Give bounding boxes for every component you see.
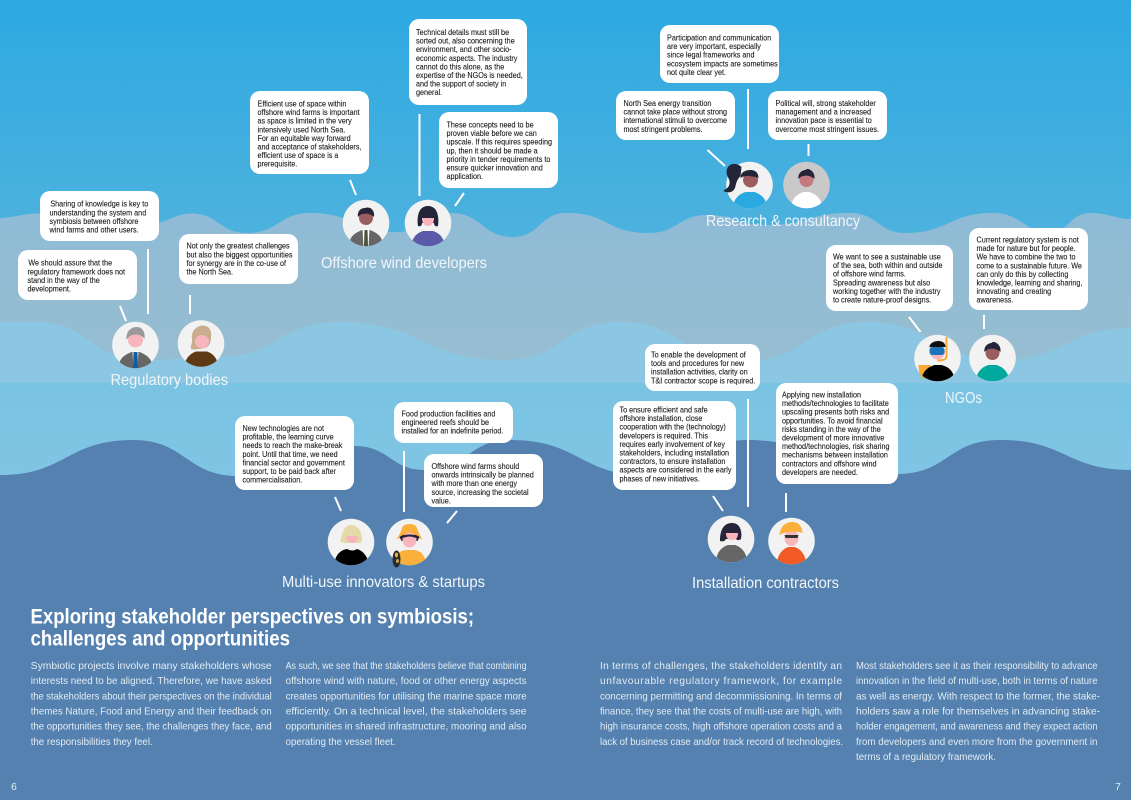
connector line [909,317,920,332]
avatar: contractor man with hard hat [768,518,815,565]
avatar: regulator man in suit [112,322,159,369]
text block: column 2: efficiently. On a technical level, the stakeholders see [286,706,527,718]
speech bubble: regulatory framework: We should assure that the [28,258,112,268]
speech bubble: sustainable use: of offshore wind farms. [833,269,906,279]
text block: column 1: themes Nature, Food and Energy and their feedback on [31,706,272,718]
connector line [785,493,787,512]
stakeholder label: Offshore wind developers [321,255,487,272]
speech bubble: proven concepts: up, then it should be made a [446,146,538,155]
speech bubble: new technologies: commercialisation. [242,475,302,485]
speech bubble: sustainable use [826,245,953,311]
speech bubble: technical details: environment, and other socio- [416,45,512,54]
title: Exploring stakeholder perspectives on symbiosis; [30,604,474,628]
speech bubble: offshore wind farms: onwards intrinsically be planned [432,470,534,480]
speech bubble: new installation methods: Applying new installation [782,390,861,400]
speech bubble: technical details: and the support of society in [416,79,506,89]
speech bubble: sharing of knowledge [40,191,159,241]
speech bubble: tools and procedures: tools and procedures for new [651,359,744,368]
speech bubble: participation: since legal frameworks and [667,50,754,60]
speech bubble: greatest challenges: but also the biggest opportunities [186,250,293,259]
speech bubble: new technologies: New technologies are not [242,423,325,433]
speech bubble: current regulatory system: knowledge, learning and sharing, [976,278,1082,288]
speech bubble: proven concepts [439,112,558,188]
text block: column 3: lack of business case and/or track record of technologies. [600,737,843,748]
text block: column 4: as well as energy. With respect to the former, the stake- [856,691,1100,702]
speech bubble: efficient use of space: prerequisite. [258,159,297,169]
background: deep-blue foreground wave [0,440,1131,800]
speech bubble: proven concepts: upscale. If this requires speeding [446,137,552,147]
connector line [983,315,985,329]
speech bubble: current regulatory system [969,228,1088,310]
speech bubble: sharing of knowledge: wind farms and other users. [49,225,139,235]
panel: regulatory bodies [18,191,298,389]
connector line [418,114,420,196]
avatar: innovator woman [328,519,374,566]
speech bubble: efficient use of space: For an equitable way forward [258,133,351,143]
avatar: NGO man [969,335,1016,382]
connector line [747,89,749,149]
page number: left: 6 [11,781,17,793]
connector line [120,306,126,321]
speech bubble: proven concepts: proven viable before we can [446,129,537,138]
speech bubble: energy transition: international stimuli to overcome [624,116,727,125]
connector line [147,249,149,314]
speech bubble: new installation methods: risks standing in the way of the [782,424,881,434]
speech bubble: energy transition: North Sea energy transition [624,98,711,108]
speech bubble: efficient and safe installation: offshore installation, close [620,414,702,423]
text block: column 4: terms of a regulatory framework. [856,752,996,763]
speech bubble: sustainable use: Spreading awareness but also [833,278,931,287]
text block: column 1: the responsibilities they feel. [31,737,153,748]
speech bubble: sustainable use: working together with the industry [832,286,941,296]
speech bubble: offshore wind farms: with more than one energy [431,479,517,488]
text block: column 3: high insurance costs, high offshore operation costs and a [600,722,842,733]
text block: column 2: As such, we see that the stakeholders believe that combining [286,661,527,672]
speech bubble: efficient use of space: intensively used North Sea. [258,125,345,134]
avatar: researcher woman with ponytail [724,162,773,209]
speech bubble: technical details: economic aspects. The industry [416,53,517,63]
connector line [403,451,405,512]
text block: column 4: from developers and even more from the government in [856,737,1098,748]
speech bubble: food production: engineered reefs should be [402,418,489,427]
speech bubble: current regulatory system: made for nature but for people. [976,244,1076,253]
speech bubble: participation: not quite clear yet. [667,67,726,77]
speech bubble: current regulatory system: awareness. [976,295,1013,305]
speech bubble: participation: are very important, especially [667,42,761,51]
text block: column 4: holder engagement, and awareness and they expect action [856,722,1098,733]
stakeholder label: Installation contractors [692,575,839,592]
speech bubble: tools and procedures: installation activities, clarity on [651,367,748,377]
speech bubble: political will: Political will, strong stakeholder [776,98,876,108]
text block: column 4 [856,661,1100,763]
text block: column 3: In terms of challenges, the stakeholders identify an [600,661,842,672]
background: sky [0,0,1131,300]
speech bubble: participation [660,25,779,83]
speech bubble: sustainable use: of the sea, both within and outside [833,261,943,270]
speech bubble: regulatory framework: regulatory framework does not [28,267,126,276]
connector line [335,497,341,511]
text block: column 3: concerning permitting and decommissioning. In terms of [600,691,842,702]
speech bubble: food production [394,402,513,443]
text block: column 4: Most stakeholders see it as their responsibility to advance [856,661,1098,672]
text block: column 2: creates opportunities for utilising the marine space more [286,691,527,702]
speech bubble: current regulatory system: innovating and creating [976,287,1051,296]
text block: column 1: the opportunities they see, the challenges they face, and [31,722,272,733]
speech bubble: new technologies: support, to be paid back after [242,466,336,476]
stakeholder label: NGOs [945,390,982,407]
speech bubble: proven concepts: priority in tender requirements to [446,154,551,164]
speech bubble: sustainable use: We want to see a sustainable use [833,252,941,262]
connector line [455,193,464,206]
title: challenges and opportunities [30,627,290,651]
speech bubble: regulatory framework [18,250,137,300]
speech bubble: energy transition: cannot take place without strong [624,107,727,117]
speech bubble: new installation methods [776,383,898,484]
speech bubble: new installation methods: opportunities. To avoid financial [782,416,883,425]
speech bubble: greatest challenges: the North Sea. [186,267,233,277]
speech bubble: technical details: sorted out, also concerning the [416,36,515,46]
speech bubble: efficient and safe installation: To ensure efficient and safe [620,405,708,415]
speech bubble: new installation methods: upscaling presents both risks and [782,407,889,417]
speech bubble: current regulatory system: come to a sustainable future. We [976,261,1082,270]
speech bubble: offshore wind farms: source, increasing the societal [432,487,529,497]
speech bubble: political will: management and a increased [776,107,871,117]
page number: right: 7 [1115,781,1121,793]
speech bubble: efficient and safe installation: phases of new initiatives. [620,474,700,483]
speech bubble: new installation methods: method/technologies, risk sharing [782,442,890,451]
speech bubble: efficient use of space: and acceptance of stakeholders, [258,142,361,152]
speech bubble: new technologies: profitable, the learning curve [242,432,334,442]
speech bubble: greatest challenges: for synergy are in the co-use of [186,258,287,268]
speech bubble: new installation methods: development of more innovative [782,433,884,443]
speech bubble: participation: Participation and communication [667,33,771,43]
speech bubble: technical details [409,19,527,105]
avatar: researcher man on grey [783,162,830,209]
speech bubble: proven concepts: application. [446,172,483,181]
speech bubble: new installation methods: methods/technologies to facilitate [782,399,889,408]
speech bubble: political will: innovation pace is essential to [776,116,872,125]
speech bubble: technical details: cannot do this alone, as the [416,62,504,72]
speech bubble: current regulatory system: Current regulatory system is not [976,235,1080,245]
speech bubble: offshore wind farms [424,454,543,507]
panel: NGOs [826,228,1088,407]
connector line [447,511,457,523]
connector line [189,295,191,314]
speech bubble: technical details: expertise of the NGOs is needed, [416,70,523,80]
speech bubble: sustainable use: to create nature-proof designs. [833,295,931,305]
text block: column 2 [286,661,527,748]
speech bubble: energy transition [616,91,735,140]
speech bubble: offshore wind farms: Offshore wind farms should [432,461,519,471]
speech bubble: efficient use of space: as space is limited in the very [258,116,352,126]
text block: column 1: Symbiotic projects involve many stakeholders whose [31,661,272,672]
speech bubble: sharing of knowledge: Sharing of knowledge is key to [50,199,149,209]
avatar: developer man in suit [343,200,389,247]
connector line [808,144,810,156]
speech bubble: technical details: general. [416,88,442,97]
speech bubble: new installation methods: developers are needed. [782,467,858,477]
speech bubble: offshore wind farms: value. [432,496,451,506]
speech bubble: tools and procedures: To enable the development of [651,350,746,360]
speech bubble: new technologies: needs to reach the make-break [242,441,342,450]
text block: column 1: interests need to be aligned. Therefore, we have asked [31,676,272,687]
speech bubble: new technologies [235,416,354,490]
speech bubble: greatest challenges: Not only the greatest challenges [186,241,290,251]
text block: column 3: unfavourable regulatory framework, for example [600,676,842,687]
speech bubble: efficient use of space: efficient use of space is a [258,151,339,160]
connector line [350,180,356,195]
speech bubble: current regulatory system: We have to combine the two to [976,252,1076,262]
speech bubble: new technologies: point. Until that time, we need [242,449,338,459]
panel: research and consultancy [616,25,887,230]
speech bubble: political will [768,91,887,140]
speech bubble: tools and procedures [645,344,760,391]
speech bubble: proven concepts: ensure quicker innovation and [446,163,543,173]
speech bubble: efficient and safe installation: developers is required. This [620,431,708,440]
speech bubble: participation: ecosystem impacts are sometimes [667,59,778,68]
avatar: contractor woman [708,516,754,563]
avatar: fisher in yellow hat with mussels [386,519,433,568]
speech bubble: energy transition: most stringent problems. [624,124,703,134]
speech bubble: regulatory framework: development. [28,284,71,294]
speech bubble: regulatory framework: stand in the way of the [28,275,100,285]
avatar: diver with snorkel [914,335,961,382]
speech bubble: sharing of knowledge: symbiosis between offshore [50,216,138,226]
panel: multi-use innovators and startups [235,402,543,591]
stakeholder label: Multi-use innovators & startups [282,574,485,591]
speech bubble: political will: overcome most stringent issues. [776,124,879,134]
text block: column 2: operating the vessel fleet. [286,737,396,748]
speech bubble: tools and procedures: T&I contractor scope is required. [651,376,755,385]
text block: column 3 [600,661,843,748]
speech bubble: efficient and safe installation: cooperation with the (technology) [620,422,726,432]
speech bubble: efficient and safe installation: stakeholders, including installation [620,448,729,458]
speech bubble: efficient and safe installation: requires early involvement of key [620,439,725,449]
speech bubble: food production: installed for an indefinite period. [402,426,503,436]
text block: column 2: offshore wind with nature, food or other energy aspects [286,676,527,687]
connector line [713,496,723,511]
speech bubble: new installation methods: contractors and offshore wind [782,459,877,468]
text block: column 2: opportunities in shared infrastructure, mooring and also [286,722,527,733]
text block: column 1 [31,661,272,748]
speech bubble: efficient use of space [250,91,369,174]
speech bubble: greatest challenges [179,234,298,284]
speech bubble: efficient and safe installation: contractors, to ensure installation [620,457,725,466]
text block: column 4: innovation in the field of multi-use, both in terms of nature [856,676,1098,687]
title [30,604,474,651]
speech bubble: current regulatory system: can only do this by collecting [976,269,1068,279]
background: upper grey-blue wave [0,213,1131,400]
text block: column 3: finance, they see that the costs of multi-use are high, with [600,706,842,718]
speech bubble: sharing of knowledge: understanding the system and [50,208,146,217]
speech bubble: efficient and safe installation: aspects are considered in the early [620,465,732,475]
text block: column 4: holders saw a role for themselves in advancing stake- [856,706,1100,718]
speech bubble: efficient use of space: Efficient use of space within [258,99,346,109]
speech bubble: proven concepts: These concepts need to be [446,120,534,130]
stakeholder label: Research & consultancy [706,213,860,230]
speech bubble: efficient use of space: offshore wind farms is important [258,108,360,117]
speech bubble: technical details: Technical details must still be [416,27,509,37]
avatar: regulator woman [178,320,224,368]
background: lower light-blue wave [0,322,1131,400]
panel: offshore wind developers [250,19,558,272]
background: light-blue band [0,383,1131,493]
stakeholder label: Regulatory bodies [110,372,228,389]
text block: column 1: the stakeholders about their perspectives on the individual [31,691,272,702]
connector line [708,150,725,166]
speech bubble: new installation methods: mechanisms between installation [782,450,888,460]
panel: installation contractors [613,344,898,592]
connector line [747,399,749,507]
avatar: developer woman [405,200,451,247]
speech bubble: new technologies: financial sector and government [242,458,346,468]
speech bubble: efficient and safe installation [613,401,736,490]
speech bubble: food production: Food production facilities and [402,409,495,419]
